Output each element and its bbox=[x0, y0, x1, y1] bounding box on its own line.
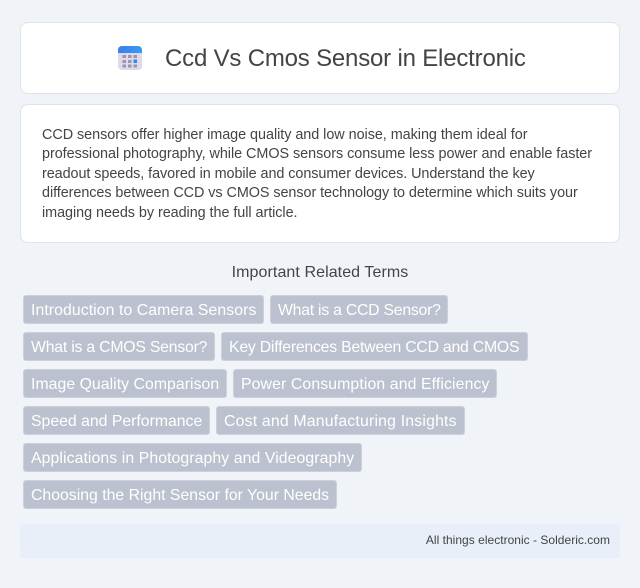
tag bbox=[23, 480, 337, 509]
title: Ccd Vs Cmos Sensor in Electronic bbox=[165, 45, 526, 72]
summary paragraph: readout speeds, favored in mobile and consumer devices. Understand the key bbox=[42, 166, 535, 182]
tag: What is a CCD Sensor? bbox=[278, 302, 441, 319]
tag: What is a CMOS Sensor? bbox=[31, 339, 207, 356]
tag: Power Consumption and Efficiency bbox=[241, 376, 490, 393]
tag: Speed and Performance bbox=[31, 413, 202, 430]
footer credit: All things electronic - Solderic.com bbox=[426, 533, 610, 547]
tag: Applications in Photography and Videography bbox=[31, 450, 354, 467]
summary paragraph: differences between CCD vs CMOS sensor technology to determine which suits your bbox=[42, 185, 578, 201]
summary paragraph bbox=[42, 127, 592, 221]
tag: Cost and Manufacturing Insights bbox=[224, 413, 457, 430]
icon: calendar grid bbox=[118, 46, 142, 70]
tag bbox=[270, 295, 448, 324]
tag: Introduction to Camera Sensors bbox=[31, 302, 256, 319]
tag bbox=[23, 443, 362, 472]
tag bbox=[221, 332, 528, 361]
heading: related terms: Important Related Terms bbox=[232, 264, 408, 281]
tag bbox=[216, 406, 465, 435]
tag: Key Differences Between CCD and CMOS bbox=[229, 339, 519, 356]
tag bbox=[23, 369, 227, 398]
tag bbox=[233, 369, 497, 398]
summary paragraph: imaging needs by reading the full article. bbox=[42, 205, 298, 221]
tag bbox=[23, 295, 264, 324]
summary paragraph: professional photography, while CMOS sensors consume less power and enable faster bbox=[42, 146, 592, 162]
summary paragraph: CCD sensors offer higher image quality and low noise, making them ideal for bbox=[42, 127, 527, 143]
tag: Image Quality Comparison bbox=[31, 376, 219, 393]
footer bar bbox=[20, 524, 620, 558]
tag bbox=[23, 406, 210, 435]
panel: summary text bbox=[20, 104, 620, 243]
tag list: related terms bbox=[23, 295, 528, 509]
tag bbox=[23, 332, 215, 361]
panel: title card bbox=[20, 22, 620, 94]
tag: Choosing the Right Sensor for Your Needs bbox=[31, 487, 329, 504]
